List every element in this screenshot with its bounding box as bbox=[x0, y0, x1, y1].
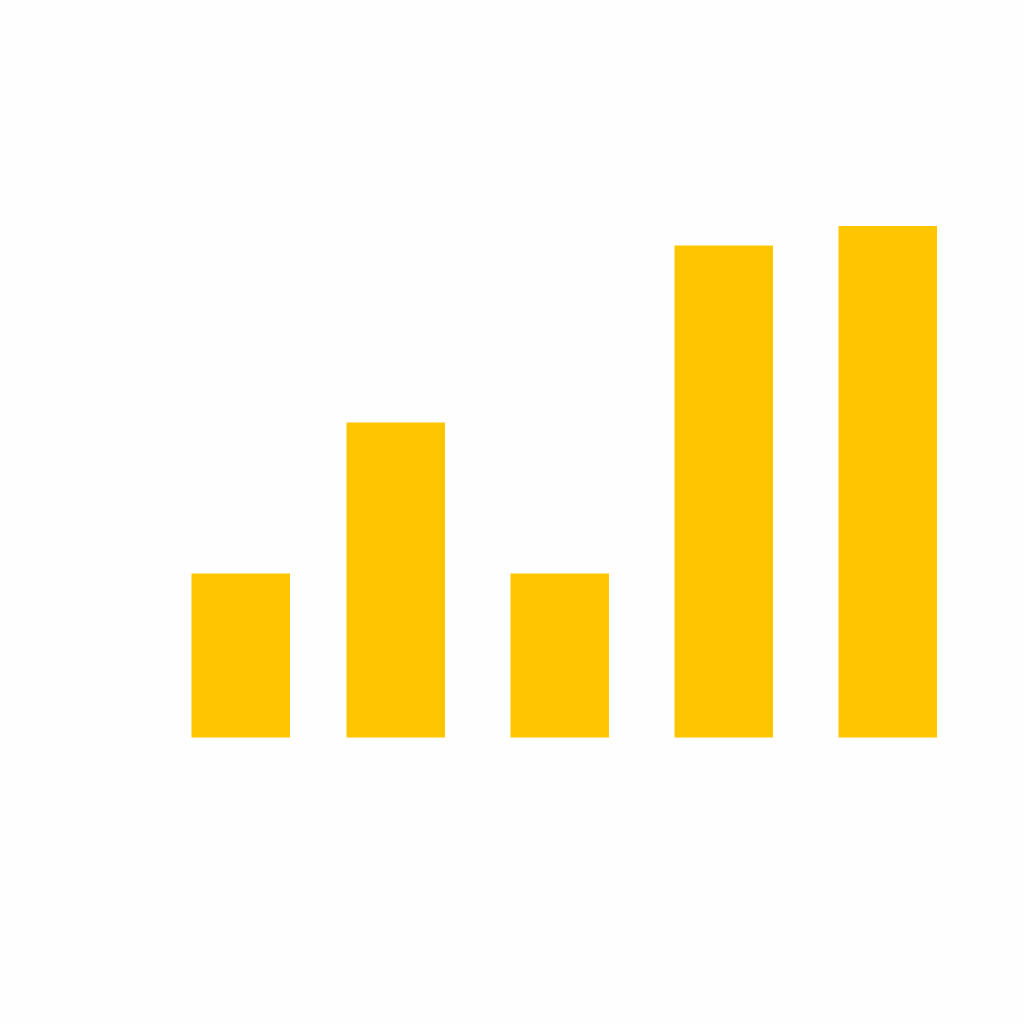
bar 1 bbox=[192, 574, 290, 738]
bar 5 bbox=[838, 226, 937, 738]
bar 2 bbox=[346, 422, 445, 738]
bar 4 bbox=[674, 246, 773, 738]
bar 3 bbox=[510, 574, 609, 738]
